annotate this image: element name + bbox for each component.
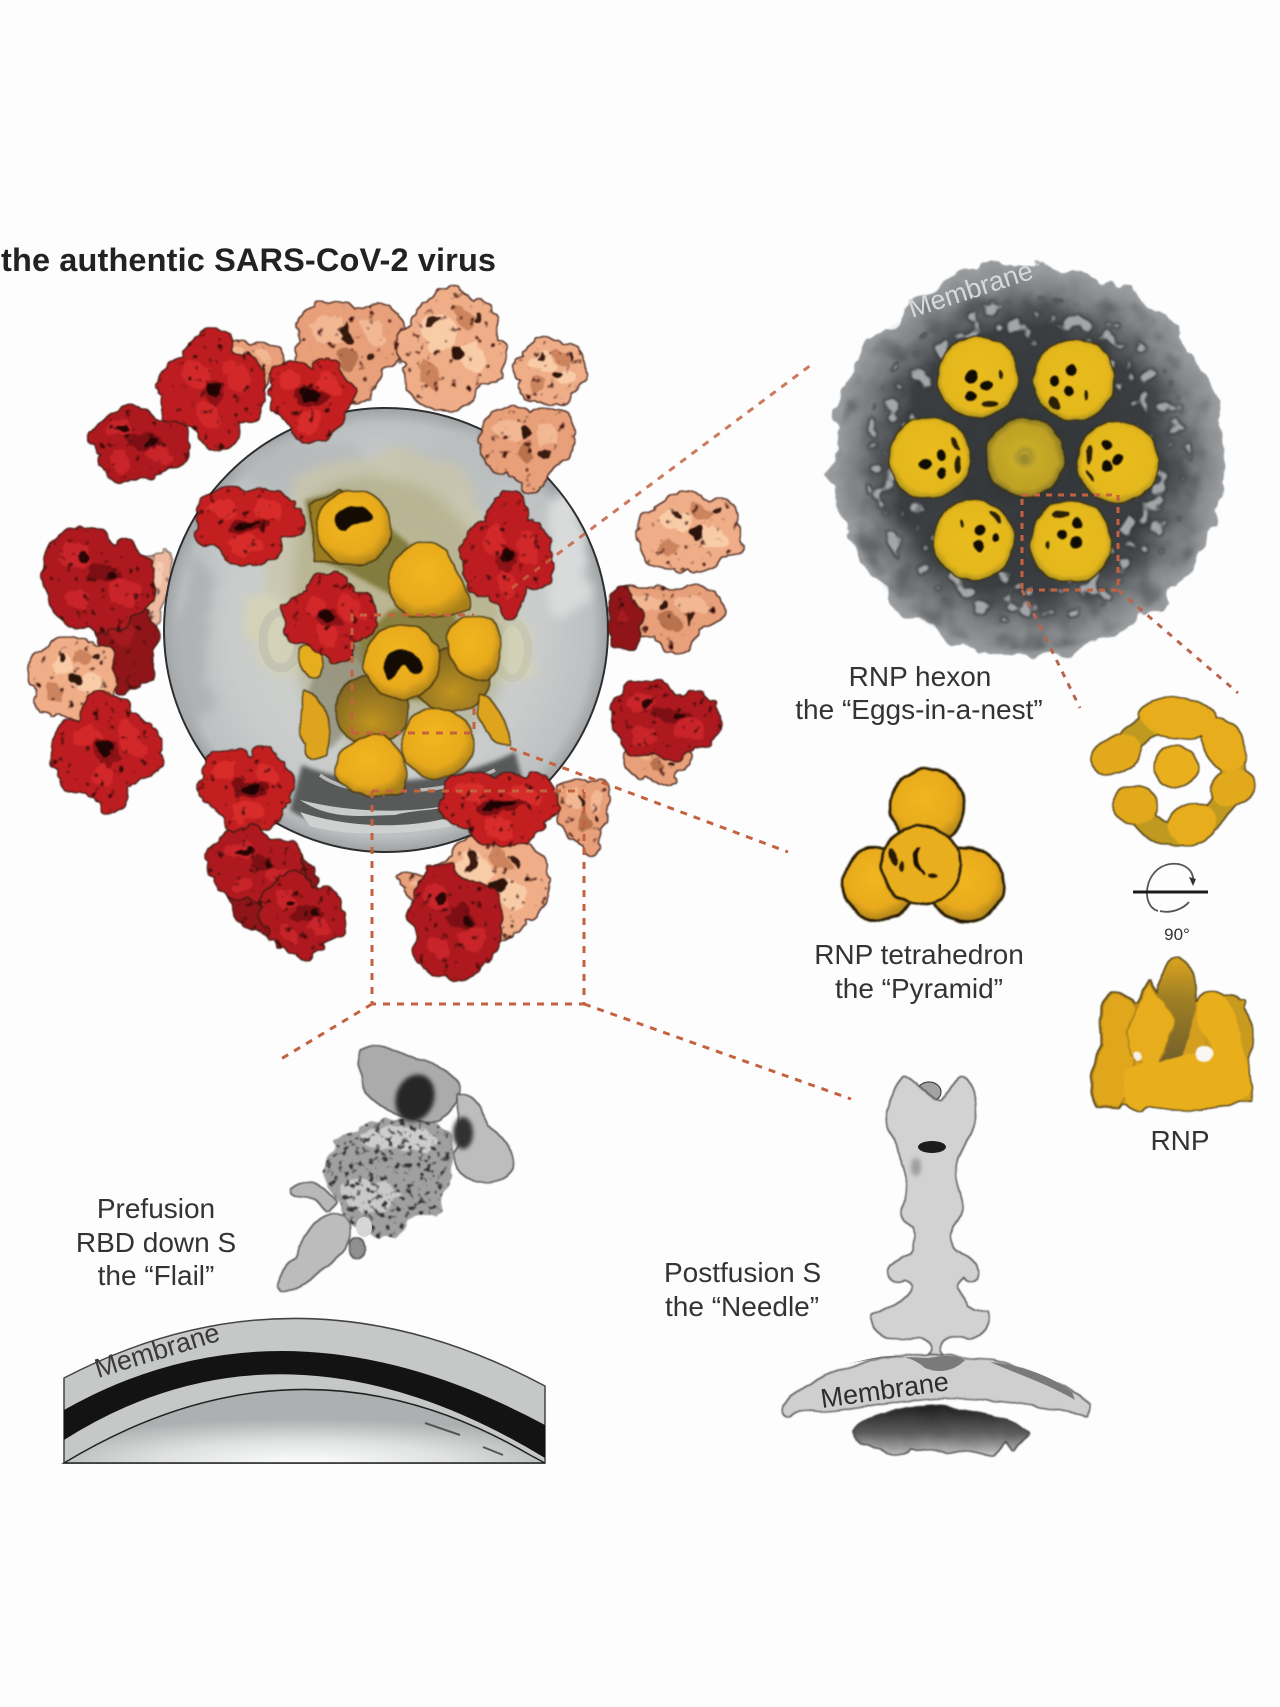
egg: lower left	[336, 736, 406, 796]
rotation arrowhead	[1189, 877, 1196, 886]
needle membrane ridge shading	[845, 1356, 1075, 1400]
peach spike: bottom left arm	[402, 873, 443, 908]
dark red spike: lower left tip	[261, 877, 345, 956]
hexon curled fragments	[865, 297, 1191, 623]
label: Needle: the “Needle”	[665, 1291, 819, 1322]
peach spike: upper right	[515, 340, 587, 404]
needle top inner ridge	[917, 1082, 941, 1102]
dashed box on virus	[352, 615, 474, 733]
pyramid left egg	[843, 848, 915, 920]
peach spike: left pale	[127, 552, 173, 626]
label: Flail: the “Flail”	[98, 1260, 214, 1291]
egg: rear dark	[336, 676, 408, 744]
rotation symbol	[1133, 864, 1208, 944]
Needle postfusion spike	[782, 1077, 1088, 1457]
dark red spike: right stub	[608, 589, 641, 649]
RNP top view ring	[1085, 695, 1259, 853]
egg: centre	[986, 418, 1064, 496]
egg: top right	[1034, 340, 1114, 420]
rotation axis	[1133, 890, 1208, 894]
red spike: top centre	[269, 358, 352, 442]
Flail prefusion spike	[279, 1047, 514, 1292]
label: Eggs-in-a-nest: the “Eggs-in-a-nest”	[795, 694, 1043, 725]
peach spike: bottom	[430, 832, 548, 941]
RNP side view	[1092, 958, 1252, 1110]
RNP tetrahedron pyramid	[843, 770, 1003, 921]
label: RNP hexon: RNP hexon	[849, 661, 991, 692]
red spike: right lower	[610, 681, 721, 760]
needle shading	[911, 1158, 921, 1176]
peach spike: right top	[637, 492, 743, 573]
flail membrane label: Membrane	[91, 1317, 223, 1384]
label: Pyramid: the “Pyramid”	[835, 973, 1003, 1004]
label: Prefusion: Prefusion	[97, 1193, 215, 1224]
needle membrane slab	[782, 1353, 1088, 1417]
virus illustration	[28, 290, 743, 982]
flail right shadow	[453, 1117, 473, 1149]
membrane outer layer	[64, 1318, 545, 1463]
olive shadows between eggs	[305, 490, 410, 600]
label: Postfusion S: Postfusion S	[664, 1257, 821, 1288]
hexon membrane label: Membrane	[905, 255, 1037, 324]
peach spike: lower right	[559, 779, 613, 855]
inner dome	[64, 1389, 545, 1463]
peach spike: behind top-left red spike	[225, 340, 282, 396]
red spike: bottom on sphere	[439, 772, 560, 846]
needle membrane label: Membrane	[819, 1366, 951, 1414]
sphere lower inner shadow	[290, 752, 525, 830]
pyramid top egg	[890, 770, 964, 842]
red spike: on sphere right	[463, 493, 552, 620]
dashed zoom lines: virus to hexon	[352, 365, 811, 733]
membrane sphere	[164, 408, 608, 852]
egg: lower right sliver	[478, 695, 510, 745]
flail top dark hollow	[389, 1069, 441, 1127]
inner olive shell	[293, 478, 502, 752]
RNP eggs inside virus	[299, 490, 510, 796]
rotation arc	[1147, 864, 1193, 912]
egg: left upper sliver	[299, 646, 322, 678]
egg: large upper right	[391, 542, 470, 617]
egg: upper back	[310, 490, 390, 565]
peach spike: top left	[295, 302, 405, 406]
red spike: far upper left	[91, 407, 189, 482]
egg: top with hole	[317, 491, 391, 565]
red spike: on sphere upper left	[194, 488, 300, 566]
flail tail	[279, 1183, 365, 1292]
flail top domain	[359, 1047, 459, 1121]
egg: right	[1078, 422, 1158, 502]
red spike: on sphere centre	[284, 571, 376, 662]
dashed zoom line: virus to pyramid	[510, 748, 788, 852]
peach spike: top centre	[397, 290, 504, 411]
egg: bottom left	[934, 500, 1014, 580]
egg: right	[446, 617, 500, 680]
hexon mottling	[838, 270, 1218, 650]
dashed box on hexon	[1022, 495, 1118, 590]
egg: left sliver	[301, 690, 329, 759]
peach spike: left front	[28, 635, 117, 718]
label: RNP: RNP	[1150, 1125, 1210, 1156]
egg: bottom right	[1031, 502, 1111, 582]
dashed zoom line: hexon to RNP left	[1022, 590, 1080, 708]
red spike: left lower	[49, 692, 161, 809]
red spike: bottom	[410, 864, 501, 982]
flail small lobe	[356, 1217, 372, 1237]
red spike: top left	[159, 330, 265, 449]
pyramid right egg	[931, 849, 1003, 921]
faint ghost rings	[263, 612, 299, 668]
sphere washes	[170, 436, 587, 834]
egg: top left	[938, 337, 1018, 417]
flail mesh body	[325, 1119, 454, 1239]
egg: centre with hole	[365, 625, 439, 699]
Flail membrane section	[64, 1317, 545, 1463]
dashed zoom box: membrane region	[281, 791, 851, 1099]
peach spike: right lower	[625, 739, 691, 788]
label: RNP tetrahedron: RNP tetrahedron	[814, 939, 1024, 970]
RNP hexon cross-section	[832, 255, 1224, 656]
flail right domain	[455, 1095, 514, 1182]
inner streaks	[425, 1423, 503, 1455]
red spike: left upper	[42, 526, 156, 633]
hexon grey disc	[832, 264, 1224, 656]
label: 90 degrees: 90°	[1164, 925, 1190, 944]
egg: olive rear	[414, 650, 490, 710]
egg: left	[890, 418, 970, 498]
needle hole	[918, 1141, 946, 1153]
peach spike: right second	[617, 585, 722, 653]
dark red spike: lower left upper	[210, 829, 306, 905]
label: RBD down S: RBD down S	[76, 1227, 236, 1258]
dashed zoom line: hexon to RNP right	[1118, 590, 1238, 693]
peach spike: upper right on sphere	[480, 407, 574, 492]
egg: lower centre	[402, 708, 472, 778]
dark red spike: lower left connector	[229, 844, 320, 934]
needle body	[872, 1077, 989, 1355]
red spike: lower left on sphere	[200, 748, 296, 833]
dark red spike: left rear	[98, 594, 157, 689]
membrane black band	[64, 1351, 545, 1458]
title: the authentic SARS-CoV-2 virus	[1, 242, 496, 278]
pyramid front egg	[882, 826, 960, 904]
needle lower membrane piece	[853, 1405, 1028, 1457]
